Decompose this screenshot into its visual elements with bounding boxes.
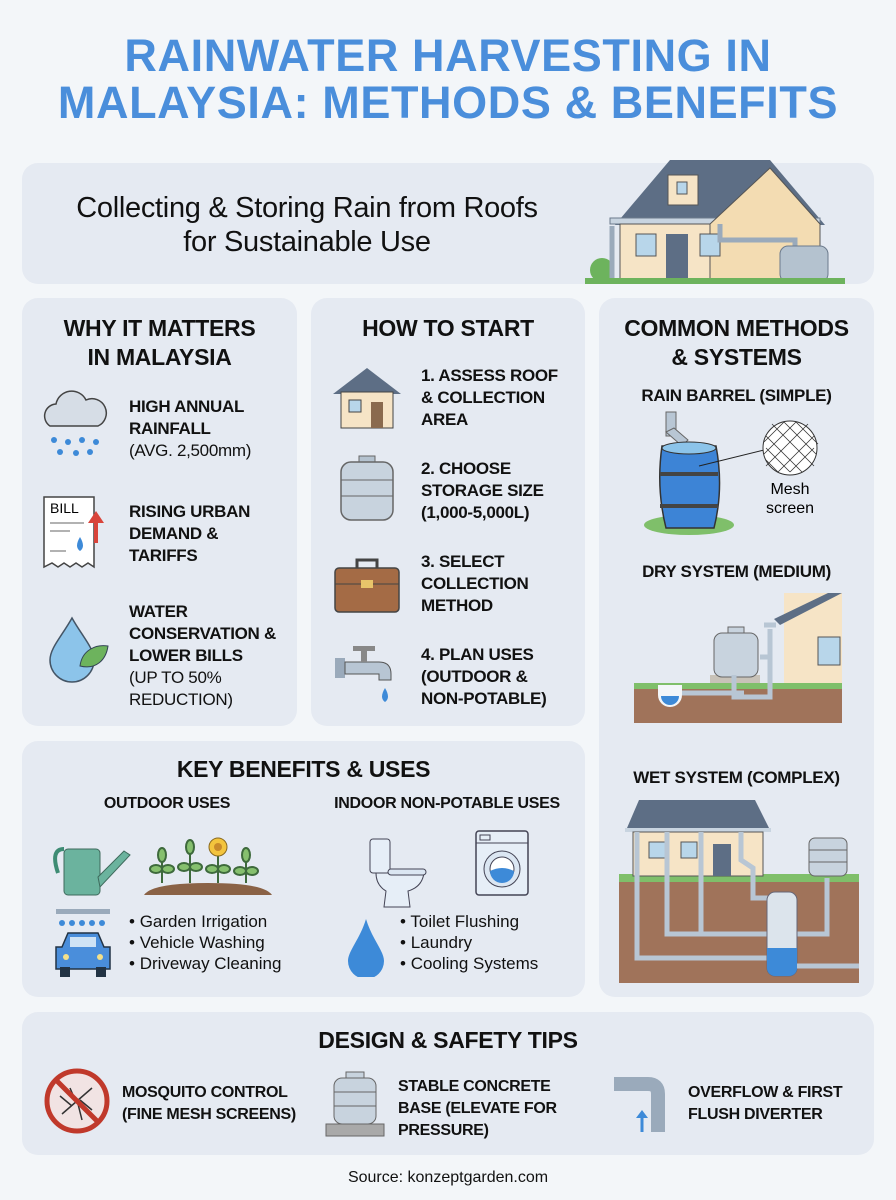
list: outdoor: [130, 912, 281, 973]
panel: why it matters: [22, 298, 297, 726]
heading: KEY BENEFITS & USES: [177, 756, 430, 782]
icon: washing machine: [475, 830, 529, 896]
icon: plants: [144, 838, 272, 895]
icon: dry system diagram: [634, 593, 842, 723]
list: indoor: Cooling Systems: [411, 954, 538, 973]
list: indoor: [400, 912, 538, 973]
icon: rain barrel with mesh: Mesh: [770, 481, 810, 498]
item: rainfall: (AVG. 2,500mm): [129, 441, 251, 460]
title: [58, 30, 838, 128]
panel: common methods: [599, 298, 874, 997]
icon: water drop with leaf: [49, 616, 109, 683]
item: conservation: [129, 602, 276, 709]
heading: DESIGN & SAFETY TIPS: [318, 1027, 578, 1053]
list: indoor: Toilet Flushing: [410, 912, 519, 931]
icon: house with tank: [585, 160, 845, 284]
subtitle text: for Sustainable Use: [183, 226, 431, 258]
heading: [624, 315, 849, 370]
icon: water drop: [348, 919, 384, 977]
sub: wet system: WET SYSTEM (COMPLEX): [633, 768, 840, 787]
source: Source: konzeptgarden.com: [348, 1169, 548, 1186]
list: outdoor: Driveway Cleaning: [140, 954, 281, 973]
icon: tank: [340, 456, 394, 521]
step 2: 2. CHOOSE STORAGE SIZE (1,000-5,000L): [421, 459, 544, 522]
step 4: 4. PLAN USES (OUTDOOR & NON-POTABLE): [421, 645, 546, 708]
list: indoor: Laundry: [411, 933, 472, 952]
icon: watering can: [53, 847, 131, 896]
subtitle text: Collecting & Storing Rain from Roofs: [76, 192, 538, 224]
heading: COMMON METHODS: [624, 315, 849, 341]
item: rainfall: [129, 397, 251, 460]
heading: IN MALAYSIA: [87, 344, 232, 370]
icon: toolbox: [334, 558, 400, 613]
panel: design & safety tips: [22, 1012, 874, 1155]
icon: rain cloud: [44, 390, 108, 456]
icon: rain barrel with mesh: screen: [766, 500, 814, 517]
item: demand: RISING URBAN DEMAND & TARIFFS: [129, 502, 250, 565]
icon: no mosquito: [44, 1068, 110, 1134]
icon: faucet: [335, 646, 392, 702]
panel: how to start: [311, 298, 585, 726]
icon: bill: [43, 496, 104, 568]
item: conservation: (UP TO 50% REDUCTION): [129, 668, 233, 709]
icon: wet system diagram: [619, 800, 859, 983]
heading: [64, 315, 255, 370]
heading: WHY IT MATTERS: [64, 315, 255, 341]
step 3: 3. SELECT COLLECTION METHOD: [421, 552, 528, 615]
sub: outdoor: OUTDOOR USES: [104, 795, 230, 812]
icon: house: [333, 368, 401, 428]
subtitle text: [76, 192, 538, 258]
icon: car wash: [55, 909, 111, 977]
icon: rain barrel with mesh: [644, 412, 818, 535]
panel: hero: [22, 163, 874, 284]
tip: base: STABLE CONCRETE BASE (ELEVATE FOR PRESSURE): [398, 1078, 557, 1139]
sub: indoor: INDOOR NON-POTABLE USES: [334, 795, 560, 812]
item: rainfall: HIGH ANNUAL RAINFALL: [129, 397, 244, 438]
title: MALAYSIA: METHODS & BENEFITS: [58, 77, 838, 128]
sub: rain barrel: RAIN BARREL (SIMPLE): [641, 386, 832, 405]
heading: & SYSTEMS: [671, 344, 802, 370]
tip: overflow: OVERFLOW & FIRST FLUSH DIVERTER: [688, 1084, 842, 1123]
icon: bill: BILL: [50, 500, 79, 516]
icon: pipe diverter: [614, 1077, 665, 1132]
title: RAINWATER HARVESTING IN: [124, 30, 772, 81]
icon: tank on base: [326, 1072, 384, 1136]
step 1: 1. ASSESS ROOF & COLLECTION AREA: [421, 366, 558, 429]
sub: dry system: DRY SYSTEM (MEDIUM): [642, 562, 831, 581]
tip: mosquito: MOSQUITO CONTROL (FINE MESH SCREENS): [122, 1084, 296, 1123]
panel: key benefits: [22, 741, 585, 997]
item: conservation: WATER CONSERVATION & LOWER BILLS: [129, 602, 276, 665]
heading: HOW TO START: [362, 315, 534, 341]
list: outdoor: Vehicle Washing: [140, 933, 265, 952]
icon: toilet: [370, 838, 426, 908]
list: outdoor: Garden Irrigation: [140, 912, 267, 931]
